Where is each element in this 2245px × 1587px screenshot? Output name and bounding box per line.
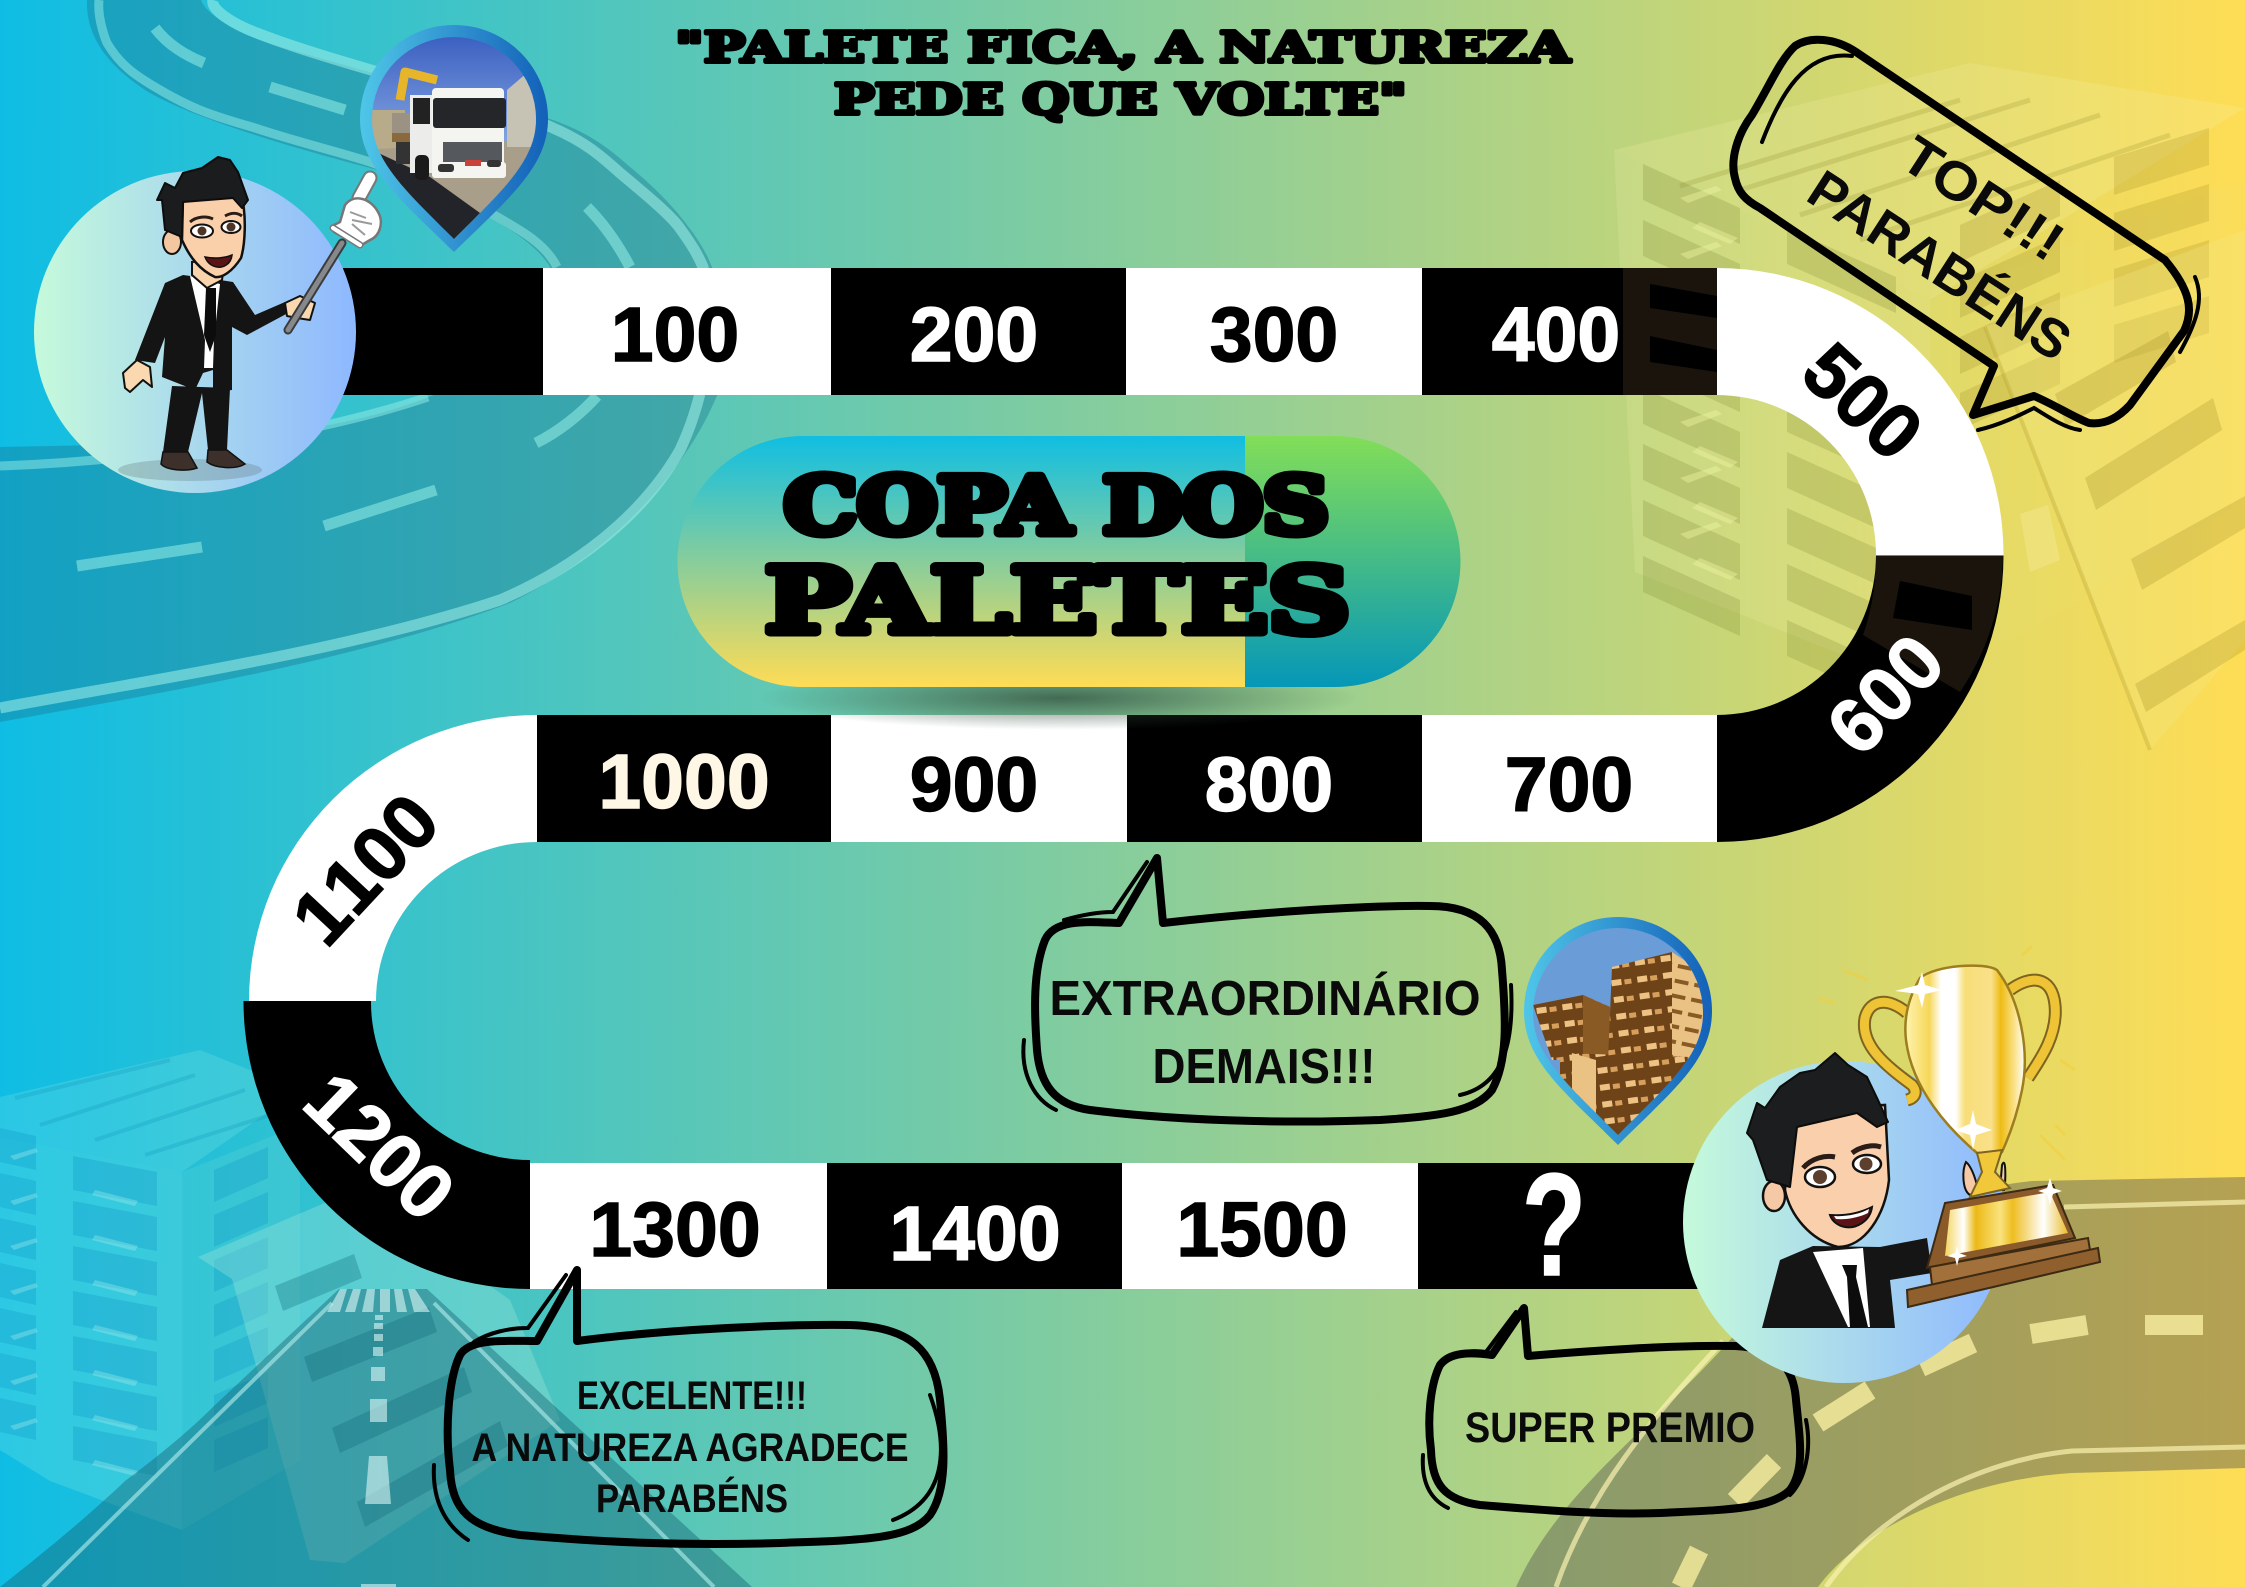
road: bottom left perspective [0, 1289, 752, 1587]
map pin: pallet pile photo [1524, 917, 1714, 1150]
map pin: truck photo [360, 25, 550, 260]
track numbers: 800 [1205, 742, 1333, 828]
speech bubble: excelente [434, 1270, 944, 1544]
title pill: copa dos paletes: PALETES [765, 548, 1350, 654]
track curve right [1717, 268, 2004, 842]
track numbers: 400 [1492, 292, 1620, 378]
speech bubble: super premio: SUPER PREMIO [1465, 1404, 1755, 1452]
slogan heading: "PALETE FICA, A NATUREZA [675, 23, 1572, 72]
track numbers: 1500 [1176, 1187, 1348, 1273]
slogan heading [675, 23, 1572, 124]
track numbers: 1200 [288, 1056, 471, 1237]
icon: presenter figure [123, 157, 342, 470]
track row 2 [537, 715, 1717, 842]
slogan heading: PEDE QUE VOLTE" [834, 75, 1407, 124]
speech bubble: top parabéns: TOP!!! [1891, 125, 2074, 273]
pallet stack: top right (faded) [1614, 63, 2245, 750]
icon: winner figure [1747, 1053, 1932, 1328]
track numbers: 500 [1786, 326, 1939, 477]
track numbers: 700 [1505, 742, 1633, 828]
track numbers: 1300 [589, 1187, 761, 1273]
speech bubble: excelente: A NATUREZA AGRADECE [472, 1426, 908, 1470]
pallet stack: bottom left (faded) [0, 1050, 560, 1563]
speech bubble: extraordinário demais: EXTRAORDINÁRIO [1050, 972, 1480, 1026]
speech bubble: excelente: EXCELENTE!!! [577, 1374, 807, 1418]
road: bottom right [1516, 1177, 2245, 1587]
track numbers: 100 [611, 292, 739, 378]
presenter avatar circle [34, 157, 381, 493]
speech bubble: top parabéns [1733, 40, 2199, 430]
game track [244, 268, 2004, 1306]
track numbers: 200 [910, 292, 1038, 378]
speech bubble: super premio [1423, 1308, 1808, 1513]
icon: gold trophy [1818, 946, 2100, 1307]
track numbers: 900 [910, 742, 1038, 828]
track numbers: 1100 [276, 778, 456, 962]
speech bubble: top parabéns: PARABÉNS [1797, 159, 2082, 373]
track curve left [244, 715, 537, 1289]
track numbers [276, 292, 1961, 1306]
track numbers: ? [1522, 1143, 1586, 1306]
road: top left [0, 0, 726, 722]
speech bubble: extraordinário demais [1023, 858, 1512, 1122]
track row 1 [343, 268, 1717, 395]
speech bubble: excelente: PARABÉNS [596, 1476, 788, 1521]
track numbers: 600 [1810, 618, 1961, 771]
icon: pointing glove [332, 178, 381, 246]
track numbers: 300 [1210, 292, 1338, 378]
winner avatar circle [1683, 946, 2100, 1383]
title pill: copa dos paletes [678, 436, 1460, 730]
track row 3 [530, 1163, 1708, 1289]
speech bubble: extraordinário demais: DEMAIS!!! [1152, 1040, 1376, 1094]
track numbers: 1000 [598, 739, 770, 825]
track numbers: 1400 [889, 1191, 1061, 1277]
title pill: copa dos paletes: COPA DOS [784, 461, 1329, 552]
